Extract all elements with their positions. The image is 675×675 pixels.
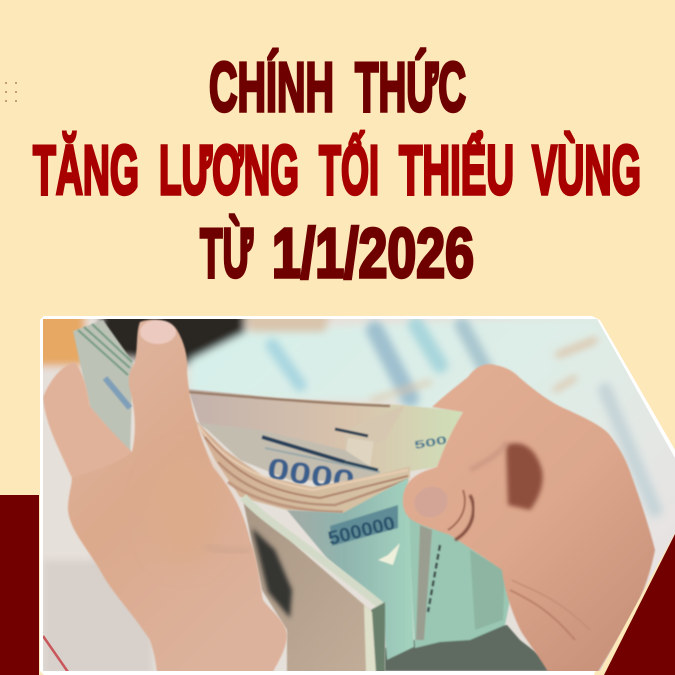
title line 3: 1/1/2026 xyxy=(272,214,474,292)
title line 2: TĂNG xyxy=(33,131,139,209)
curved note edges xyxy=(195,420,410,514)
title line 2: TỐI xyxy=(319,130,379,209)
front bundle cover xyxy=(243,497,385,672)
title xyxy=(33,48,641,292)
decorative dot grid xyxy=(5,82,17,102)
banknote digits: 000: 0000 xyxy=(265,452,357,499)
top notes of the fan xyxy=(188,388,462,487)
table edge red line xyxy=(43,636,68,672)
left fingers behind thumb xyxy=(43,362,135,485)
title line 1: THỨC xyxy=(355,48,466,126)
title line 1: CHÍNH xyxy=(209,48,334,126)
title line 2 xyxy=(33,130,641,209)
left bundle of notes xyxy=(73,320,133,455)
photo: hands counting banknotes xyxy=(30,310,675,675)
title line 2: THIỂU xyxy=(399,130,514,209)
maroon block bottom left xyxy=(0,495,39,675)
left hand with thumb xyxy=(68,320,287,672)
photo white frame xyxy=(40,316,675,675)
maroon corner bottom right xyxy=(604,534,675,675)
right hand xyxy=(403,364,655,672)
banknote digits: small label: 500 xyxy=(413,434,448,452)
blurred banknote print on paper xyxy=(272,325,655,510)
banknote digits: 500000: 500000 xyxy=(326,513,397,550)
right stack of green notes xyxy=(384,517,548,671)
title line 2: LƯƠNG xyxy=(159,131,299,209)
photo backdrop xyxy=(30,310,675,675)
blue-green note with 500000 xyxy=(287,478,414,660)
title line 3: TỪ xyxy=(200,214,253,292)
title line 3 xyxy=(200,214,474,292)
